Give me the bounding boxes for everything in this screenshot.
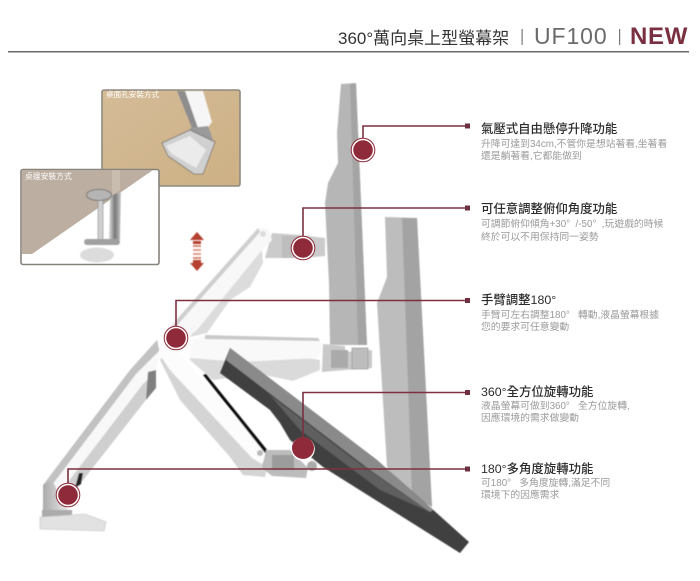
title: UF100 <box>534 23 608 49</box>
feature: arm swivel: 您的要求可任意變動 <box>481 320 569 333</box>
feature: rotation: 液晶螢幕可做到360° 全方位旋轉, <box>481 399 630 412</box>
feature: gas lift <box>481 121 667 162</box>
icon: up-down arrow <box>190 232 204 271</box>
feature: gas lift: 還是躺著看,它都能做到 <box>481 149 582 162</box>
feature: arm swivel: 手臂調整180° <box>481 292 556 307</box>
monitor: upper vertical <box>325 83 367 345</box>
feature: rotation: 360°全方位旋轉功能 <box>481 384 594 399</box>
feature: tilt: 可調節俯仰傾角+30° /-50° ,玩遊戲的時候 <box>481 217 664 230</box>
monitor: tilted dark <box>220 348 469 553</box>
feature: multi-angle: 環境下的因應需求 <box>481 488 560 501</box>
label: desk edge: 桌邊安裝方式 <box>25 171 72 181</box>
inset: desk hole mounting <box>102 89 240 186</box>
feature: tilt: 終於可以不用保持同一姿勢 <box>481 230 599 243</box>
feature: multi-angle <box>481 461 610 501</box>
feature: gas lift: 氣壓式自由懸停升降功能 <box>481 121 618 136</box>
title <box>338 23 688 50</box>
arm: upper <box>164 228 325 342</box>
monitor: rear vertical <box>377 217 432 507</box>
title: 360°萬向桌上型螢幕架 <box>338 29 509 48</box>
feature: multi-angle: 可180° 多角度旋轉,滿足不同 <box>481 476 610 489</box>
inset: desk edge clamp <box>21 170 159 264</box>
arm: lower <box>158 340 317 478</box>
feature: arm swivel <box>481 292 659 333</box>
marker squares <box>465 124 470 472</box>
feature: tilt: 可任意調整俯仰角度功能 <box>481 201 618 216</box>
feature: tilt <box>481 201 664 243</box>
feature: rotation: 因應環境的需求做變動 <box>481 411 579 424</box>
arm: base segment <box>40 340 160 531</box>
label: desk hole: 桌面孔安裝方式 <box>106 89 160 99</box>
feature: rotation <box>481 384 630 424</box>
title: NEW <box>630 23 688 50</box>
arm: middle position <box>190 335 372 381</box>
connector lines <box>68 126 467 495</box>
feature: multi-angle: 180°多角度旋轉功能 <box>481 461 594 476</box>
feature: arm swivel: 手臂可左右調整180° 轉動,液晶螢幕根據 <box>481 308 659 321</box>
feature: gas lift: 升降可達到34cm,不管你是想站著看,坐著看 <box>481 137 667 150</box>
marker circles <box>56 138 375 507</box>
